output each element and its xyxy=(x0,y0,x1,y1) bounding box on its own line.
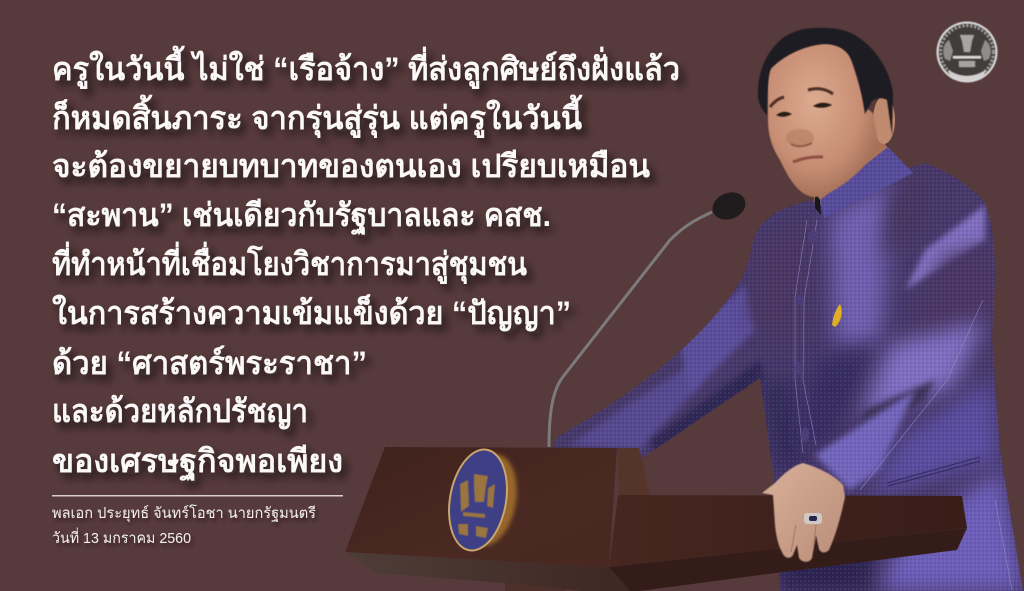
stitching and pocket xyxy=(795,220,1012,590)
pin xyxy=(832,304,842,327)
quote text: และด้วยหลักปรัชญา xyxy=(52,393,308,430)
quote text: ด้วย “ศาสตร์พระราชา” xyxy=(52,345,367,381)
quote text: ครูในวันนี้ ไม่ใช่ “เรือจ้าง” ที่ส่งลูกศิษย์ถึงฝั่งแล้ว xyxy=(52,45,680,90)
neck xyxy=(812,135,888,205)
podium xyxy=(345,444,967,591)
buttons xyxy=(795,230,817,443)
speaker xyxy=(540,28,1024,591)
shelf front xyxy=(609,495,967,567)
hair xyxy=(758,28,893,135)
arm and chest light and shade xyxy=(570,170,1024,591)
podium side xyxy=(617,448,650,495)
attribution: วันที่ 13 มกราคม 2560 xyxy=(52,527,191,547)
facial features xyxy=(770,89,833,162)
quote text: จะต้องขยายบทบาทของตนเอง เปรียบเหมือน xyxy=(52,148,650,184)
quote text xyxy=(52,45,680,482)
podium front face xyxy=(345,447,617,567)
jacket body xyxy=(540,140,1024,591)
quote text: “สะพาน” เช่นเดียวกับรัฐบาลและ คสช. xyxy=(52,197,551,236)
divider xyxy=(52,495,343,496)
ring xyxy=(804,513,822,524)
podium seal xyxy=(440,444,524,556)
quote text: ในการสร้างความเข้มแข็งด้วย “ปัญญา” xyxy=(52,293,571,332)
quote text: ก็หมดสิ้นภาระ จากรุ่นสู่รุ่น แต่ครูในวันนี้ xyxy=(52,94,583,139)
podium column xyxy=(505,580,565,591)
microphone xyxy=(549,188,750,447)
face xyxy=(768,44,878,197)
ear xyxy=(873,96,895,144)
collar xyxy=(820,147,913,218)
emblem: top right seal xyxy=(936,22,998,82)
attribution xyxy=(52,504,316,547)
quote text: ของเศรษฐกิจพอเพียง xyxy=(52,443,343,482)
shelf underside xyxy=(609,528,967,591)
quote text: ที่ทำหน้าที่เชื่อมโยงวิชาการมาสู่ชุมชน xyxy=(52,241,527,285)
hand xyxy=(762,463,845,562)
podium underside xyxy=(345,552,630,591)
attribution: พลเอก ประยุทธ์ จันทร์โอชา นายกรัฐมนตรี xyxy=(52,504,316,523)
